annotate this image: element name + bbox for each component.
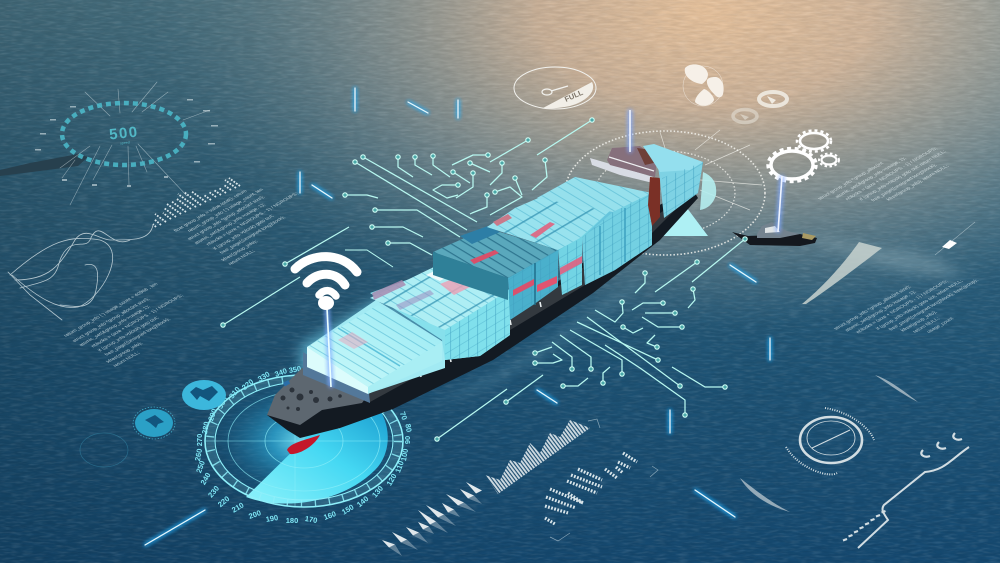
radar, lower left bbox=[193, 364, 414, 525]
text on the right, upper: free_page((unsigned long)block); bbox=[870, 163, 939, 203]
white wake shape bbox=[802, 242, 882, 304]
speed value: 500 bbox=[108, 124, 140, 143]
text on the right, upper: struct group_info *group_alloc(int bbox=[817, 161, 886, 201]
code text block 2: if (group_info->block) goto out; bbox=[97, 316, 161, 353]
text on the right, lower: if (group_info->block) goto out; return NULL; bbox=[875, 279, 965, 331]
radar degree labels: 190 bbox=[265, 513, 279, 524]
radar degree labels: 70 bbox=[398, 410, 409, 421]
code text block 2: struct group_info *group_alloc(int size); bbox=[71, 297, 151, 343]
dashed bar chart, upper left bbox=[153, 178, 240, 227]
radar degree labels: 90 bbox=[403, 436, 412, 444]
icon: globe faint bbox=[80, 433, 128, 467]
text on the right, lower: free_page((unsigned long)block); free(group); bbox=[888, 278, 980, 332]
code text block 1: nblocks = (size + NGROUPS - 1) / NGROUPS; bbox=[205, 192, 300, 247]
radar sweep sector bbox=[246, 410, 388, 504]
code text block 1: return_group_info ( ) usage_count, len bbox=[186, 188, 265, 233]
speed dial: 500 bbox=[35, 82, 218, 205]
radar degree labels: 220 bbox=[216, 494, 231, 509]
radar glow disc bbox=[211, 379, 397, 503]
icon: globe blue large bbox=[182, 380, 226, 410]
line chart, left bbox=[8, 225, 153, 320]
radar degree labels: 100 bbox=[399, 448, 410, 462]
vertical beam from tug bbox=[778, 176, 782, 232]
container ship bbox=[267, 144, 703, 454]
radar degree labels: 140 bbox=[355, 494, 370, 509]
dot matrix chart, bottom center bbox=[545, 453, 637, 524]
icon: globe large bbox=[759, 92, 787, 106]
text on the right, upper: atomic_set(&group_info->usage, 1); bbox=[834, 156, 908, 199]
aft containers bbox=[643, 144, 703, 218]
code text block 2: atomic_set(&group_info->usage, 1); bbox=[78, 305, 152, 347]
white rectangle marker bbox=[935, 222, 975, 255]
speed dial: 500: speed bbox=[120, 140, 130, 145]
circuit traces, lower bbox=[437, 239, 745, 439]
radar degree labels: 330 bbox=[256, 370, 271, 384]
code text block 1: kfree(group_info); bbox=[220, 239, 260, 262]
text on the right, lower: kfree(group_info); bbox=[900, 310, 939, 333]
code text block 1: free_page((unsigned long)block); bbox=[219, 215, 287, 255]
glowing dashes bbox=[145, 88, 770, 545]
text on the right, lower: return NULL; bbox=[912, 317, 942, 334]
tug wake bbox=[815, 238, 965, 276]
breakwater at left bbox=[0, 154, 88, 176]
vertical beam from ship bow bbox=[327, 308, 331, 387]
block 2 containers bbox=[370, 264, 510, 360]
open side below containers bbox=[368, 195, 690, 402]
compass gauge bottom right bbox=[786, 408, 874, 474]
radar degree labels: 300 bbox=[216, 395, 230, 410]
radar degree labels: 170 bbox=[304, 514, 318, 525]
block 4 containers bbox=[487, 188, 613, 296]
radar degree labels bbox=[193, 364, 414, 525]
vertical beam from bridge bbox=[629, 110, 631, 152]
icon: fan bbox=[683, 64, 724, 106]
radar degree labels: 110 bbox=[393, 460, 406, 474]
radar degree labels: 150 bbox=[340, 503, 355, 517]
gauge: FULL: FULL bbox=[563, 88, 585, 104]
bulbous bow bbox=[287, 435, 320, 454]
radar degree labels: 240 bbox=[199, 471, 213, 486]
text on the right, upper: kfree(group_info); return NULL; bbox=[885, 164, 951, 202]
radar degree labels: 250 bbox=[194, 459, 207, 474]
histogram chart, bottom center bbox=[485, 420, 590, 494]
code text block 2: free_page((unsigned long)block); bbox=[104, 317, 172, 357]
bow bulkhead bbox=[303, 352, 370, 403]
radar degree labels: 340 bbox=[273, 366, 288, 379]
radar degree labels: 310 bbox=[227, 385, 242, 400]
dashed ring bbox=[62, 103, 186, 165]
radar degree labels: 270 bbox=[195, 434, 204, 446]
code text block 1: if (group_info->block) goto out; bbox=[212, 214, 276, 251]
block 1 containers bbox=[307, 300, 445, 394]
code text block 2: nblocks = (size + NGROUPS - 1) / NGROUPS; bbox=[90, 294, 185, 349]
dotted radar circle around stern bbox=[565, 130, 765, 255]
radar degree labels: 120 bbox=[385, 472, 399, 487]
code text block 2: return NULL; bbox=[112, 351, 142, 368]
radar degree labels: 350 bbox=[288, 364, 302, 375]
text on the right, lower: struct group_info *group_alloc(int size); bbox=[833, 285, 913, 331]
connector chart, lower right bbox=[843, 433, 969, 548]
icon: wifi bbox=[295, 257, 357, 310]
text on the right, upper: if (group_info->block) goto out; return NULL; bbox=[858, 150, 948, 202]
code text block 1: struct group_info *group_alloc(int size); bbox=[186, 195, 267, 241]
container glow bbox=[300, 298, 445, 398]
radar degree labels: 160 bbox=[322, 509, 337, 522]
tug boat bbox=[732, 222, 817, 246]
icons: gears bbox=[768, 130, 839, 182]
text on the right, lower: atomic_set(&group_info->usage, 1); bbox=[844, 290, 918, 333]
text on the right, upper: nblocks = (size + NGROUPS - 1) / NGROUPS; bbox=[844, 146, 939, 201]
radar degree labels: 280 bbox=[200, 421, 211, 435]
arcs bbox=[740, 375, 918, 512]
gauge: FULL bbox=[514, 67, 596, 109]
circuit traces, upper bbox=[223, 120, 592, 325]
radar degree labels: 290 bbox=[206, 407, 219, 422]
code text block 2: kfree(group_info); bbox=[105, 341, 144, 364]
radar rings bbox=[205, 375, 403, 507]
radar degree labels: 230 bbox=[206, 484, 221, 499]
bridge superstructure bbox=[590, 146, 660, 226]
radar degree labels: 260 bbox=[193, 448, 204, 462]
cyan sectors bbox=[700, 172, 716, 210]
icon: globe blue small bbox=[133, 407, 175, 439]
block 3 containers, dark bbox=[433, 226, 558, 320]
code text block 1: float group_info = value.total(); return bbox=[173, 189, 249, 233]
radar degree labels: 130 bbox=[370, 484, 385, 499]
block 5 containers bbox=[537, 177, 652, 285]
radar degree labels: 180 bbox=[286, 516, 298, 525]
spiky chart, bottom bbox=[382, 482, 482, 548]
icon: globe small bbox=[733, 110, 757, 122]
hull bbox=[267, 188, 698, 438]
code text block 1: return NULL; bbox=[227, 249, 257, 266]
radar degree labels: 210 bbox=[230, 501, 245, 515]
text on the right, lower: usage_count bbox=[925, 316, 956, 334]
code text block 2: return_group_info ( ) usage_count + 40968 , len bbox=[63, 282, 160, 338]
code text block 1: atomic_set(&group_info->usage, 1); bbox=[193, 203, 267, 246]
radar degree labels: 80 bbox=[403, 423, 414, 433]
ship wake bbox=[420, 275, 640, 408]
radar degree labels: 320 bbox=[240, 377, 255, 392]
bow deck bbox=[267, 368, 370, 425]
text on the right, lower: nblocks = (size + NGROUPS - 1) / NGROUPS; bbox=[855, 279, 950, 334]
radar degree labels: 200 bbox=[247, 508, 262, 521]
